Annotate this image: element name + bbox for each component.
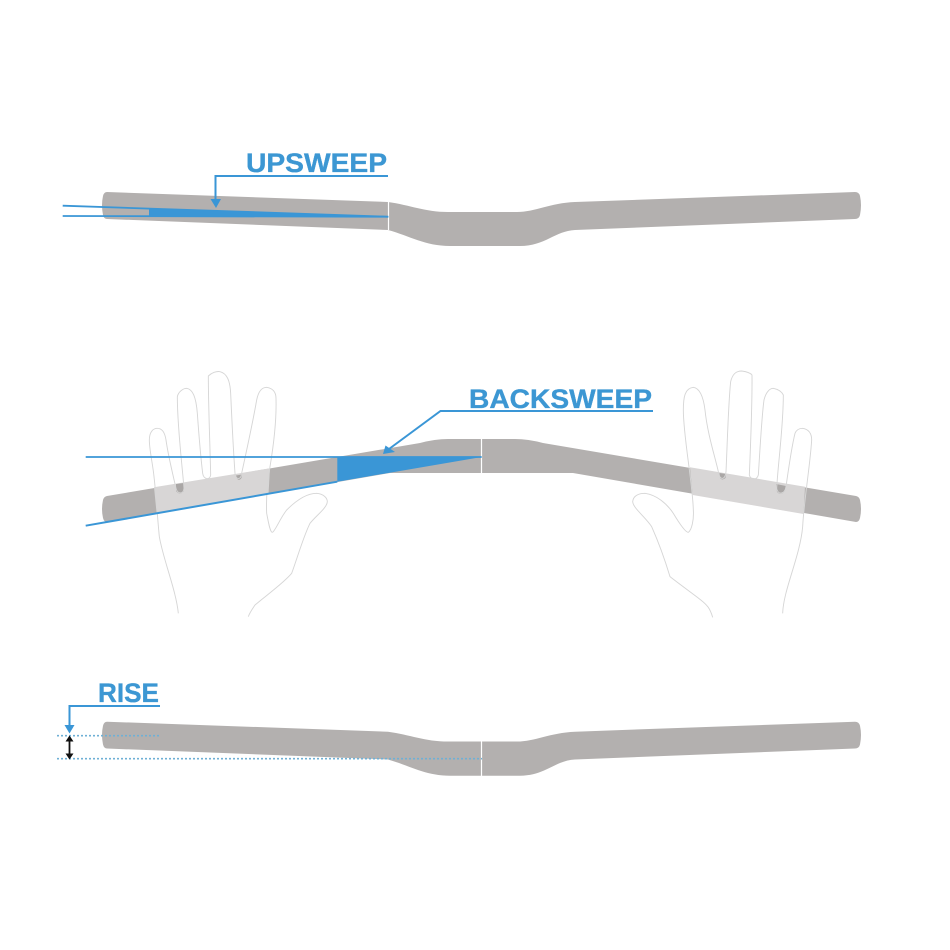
- handlebar: rise: [102, 722, 861, 776]
- grip highlight: left: [154, 468, 270, 514]
- lower angle line: [63, 215, 388, 218]
- heading: backsweep: BACKSWEEP: [469, 384, 652, 414]
- upper angle line: [63, 206, 388, 217]
- heading: rise: RISE: [98, 678, 159, 708]
- arrow: rise leader: [64, 706, 160, 734]
- hand: left: [149, 372, 327, 617]
- handlebar: backsweep: [102, 439, 861, 522]
- centre mark: [480, 741, 482, 776]
- finger shadows: [176, 473, 786, 494]
- arrow: upsweep leader: [210, 176, 388, 208]
- upper dotted reference line: [57, 735, 160, 737]
- lower dotted reference line: [57, 758, 482, 760]
- centre mark: [388, 202, 390, 230]
- horizontal reference line: [86, 456, 482, 458]
- angled reference line: [86, 482, 337, 526]
- hand: right: [633, 371, 812, 617]
- heading: upsweep: UPSWEEP: [246, 148, 387, 178]
- arrow: backsweep leader: [383, 411, 653, 454]
- centre mark: [480, 439, 482, 473]
- grip highlight: right: [690, 467, 805, 514]
- panel: rise: [57, 678, 861, 776]
- upsweep angle wedge: [149, 208, 388, 217]
- double arrow: rise height: [66, 736, 74, 760]
- backsweep angle wedge: [337, 457, 482, 482]
- panel: backsweep: [86, 371, 861, 617]
- handlebar: upsweep: [102, 192, 861, 246]
- panel: upsweep: [63, 148, 861, 246]
